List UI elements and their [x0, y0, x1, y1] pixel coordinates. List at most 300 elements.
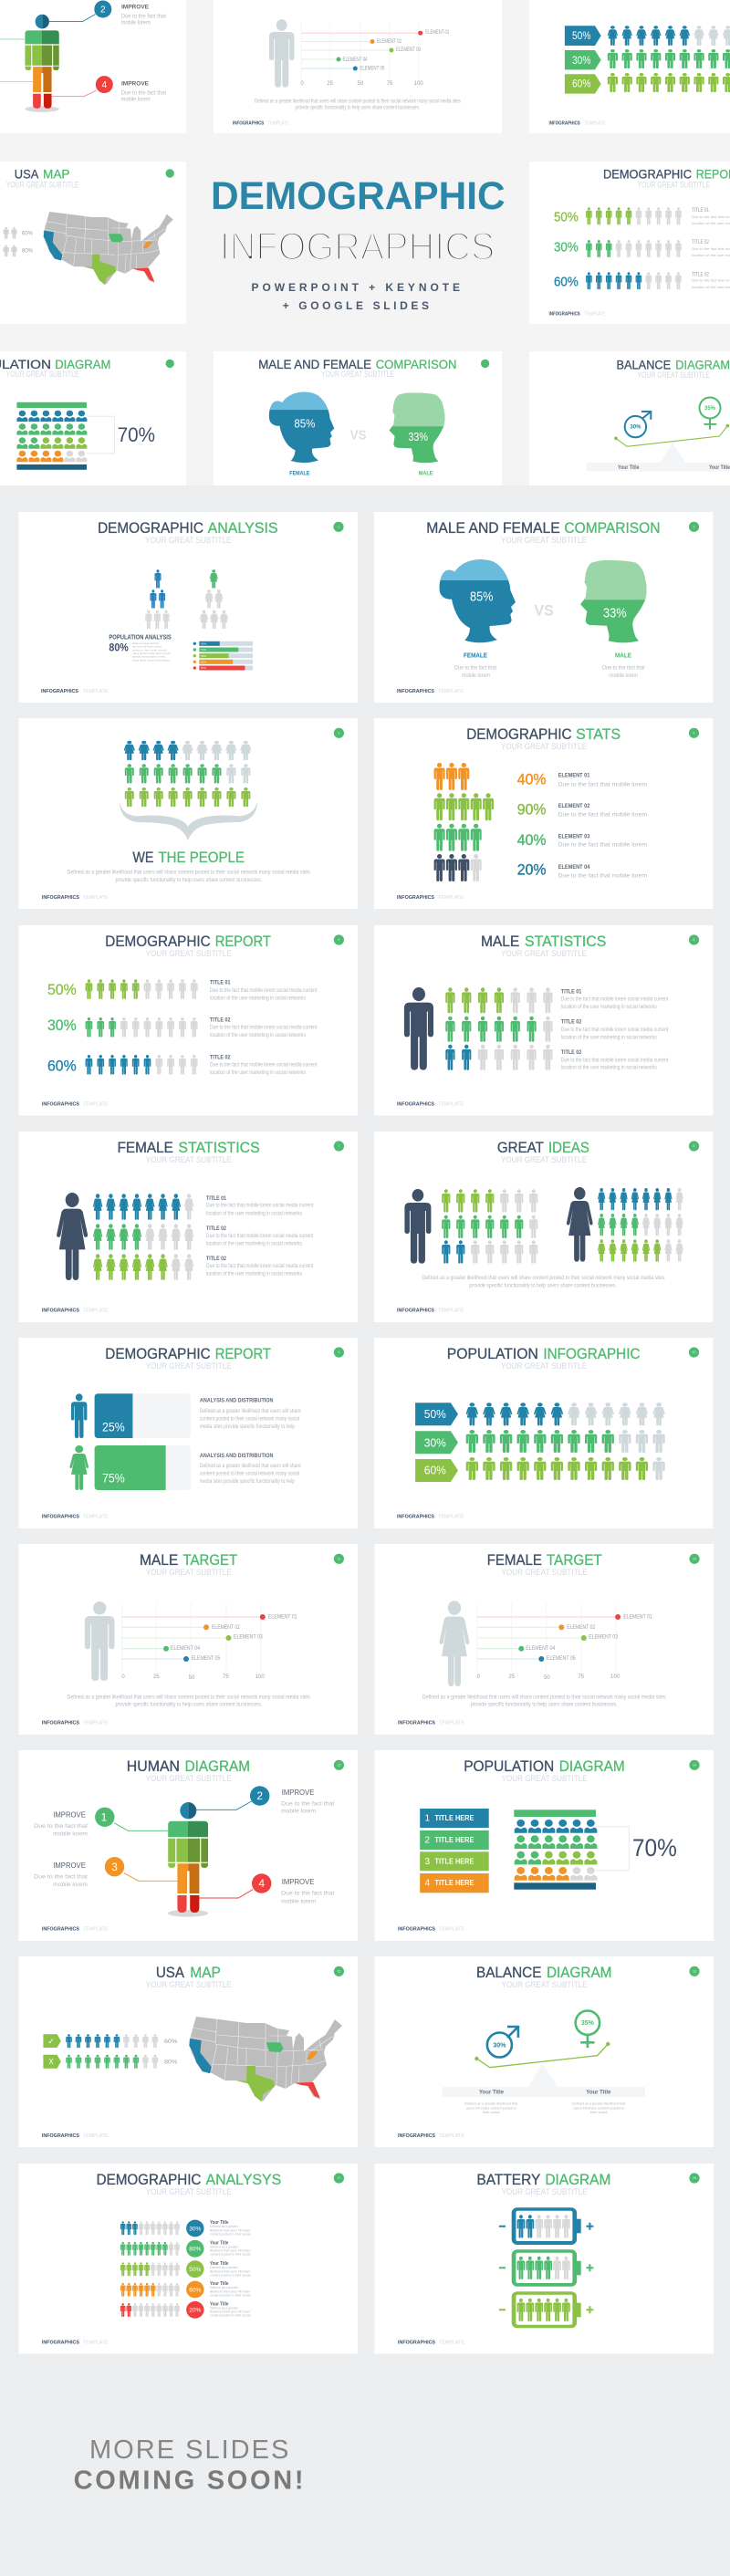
title: [476, 1965, 611, 1981]
title: DIAGRAM: [547, 1965, 611, 1981]
text block 1: ANALYSIS AND DISTRIBUTION: [200, 1398, 274, 1404]
title: DIAGRAM: [55, 358, 110, 371]
chart labels: [343, 30, 450, 71]
male label: Due to the fact that: [602, 665, 645, 672]
label 3: [420, 1851, 489, 1871]
column 1 text: their social: [483, 2111, 500, 2114]
column 2 text: [572, 2090, 625, 2114]
female row 2: [598, 1214, 683, 1236]
chart axis: 0: [477, 1674, 481, 1680]
chart labels: ELEMENT 01: [425, 30, 450, 36]
chart axis: [477, 1674, 620, 1681]
values: 85%: [294, 417, 315, 430]
page number: 13: [337, 1763, 340, 1767]
navy row: [434, 854, 482, 881]
footer: INFOGRAPHICS: [42, 2340, 80, 2345]
percent labels: 80%: [22, 248, 34, 254]
text block 1: content posted to their social network many social: [200, 1415, 299, 1422]
text block 3: [210, 1054, 318, 1076]
text block 2: Defined as a greater: [210, 2245, 239, 2248]
title: MAP: [190, 1965, 221, 1981]
stat 2: ELEMENT 02: [558, 803, 590, 809]
percent labels: 50%: [554, 209, 579, 224]
panel: female target: [374, 1544, 714, 1735]
footer: TEMPLATE: [83, 1927, 109, 1933]
footer: [397, 1309, 464, 1314]
footer: INFOGRAPHICS: [42, 895, 80, 901]
label 2: TITLE HERE: [434, 1836, 474, 1844]
column 2 text: Your Title: [586, 2090, 611, 2096]
title: POPULATION: [464, 1758, 554, 1775]
male head: [389, 393, 444, 463]
subtitle: YOUR GREAT SUBTITLE: [146, 1980, 232, 1989]
icon row 1: [120, 2221, 180, 2235]
page number: [334, 1141, 344, 1152]
title: DEMOGRAPHIC: [105, 933, 211, 950]
text block 1: [206, 1195, 313, 1216]
large male figure: [404, 987, 433, 1070]
footer: TEMPLATE: [584, 311, 606, 317]
text block 3: location of the user marketing in social networks: [210, 1069, 306, 1076]
title: DEMOGRAPHIC: [466, 726, 572, 743]
large female figure: [57, 1193, 88, 1280]
text block 2: Your Title: [210, 2240, 229, 2246]
description: provide specific functionality to help users share content businesses.: [471, 1702, 618, 1708]
female row: [466, 1403, 665, 1425]
page number: [689, 522, 699, 532]
symbol values: 35%: [581, 2020, 595, 2027]
page number: 18: [693, 2176, 696, 2180]
footer: TEMPLATE: [267, 120, 289, 126]
page number: 6: [694, 938, 695, 942]
male label: mobile lorem: [610, 673, 638, 679]
callout 4: 4: [102, 80, 108, 90]
icon row 3: [86, 1055, 198, 1075]
callout 1: 1: [101, 1810, 108, 1823]
female symbol: [699, 398, 721, 430]
subtitle: YOUR GREAT SUBTITLE: [6, 181, 79, 190]
callout text 4: [121, 80, 166, 102]
page number: [689, 728, 699, 738]
percent circles: 60%: [189, 2287, 202, 2293]
text block 1: Your Title: [210, 2220, 229, 2226]
page number: [481, 360, 489, 368]
chart axis: 100: [256, 1674, 265, 1680]
stat 4: ELEMENT 04: [558, 864, 590, 871]
footer: [549, 120, 606, 126]
callout text 2: IMPROVE: [282, 1789, 314, 1797]
text block 2: Due to the fact that mobile lorem social media current: [561, 1027, 668, 1033]
callout text 3: IMPROVE: [53, 1862, 86, 1870]
icon row 3: [445, 1045, 553, 1070]
tag 60%: 60%: [424, 1464, 446, 1477]
footer: [397, 1102, 464, 1108]
chart axis: 75: [578, 1674, 585, 1680]
title: [447, 1346, 641, 1362]
chart labels: ELEMENT 05: [547, 1656, 576, 1662]
title: [617, 359, 730, 372]
title: STATISTICS: [525, 933, 606, 950]
page number: 14: [693, 1763, 696, 1767]
title: ANALYSIS: [208, 520, 278, 537]
label 4: TITLE HERE: [434, 1879, 474, 1887]
text block 2: [210, 2240, 251, 2257]
label 1: 1: [425, 1814, 431, 1823]
panel: male target: [18, 1544, 358, 1735]
male symbol: [625, 412, 651, 437]
callout text 1: Due to the fact that: [34, 1823, 88, 1830]
bar chart: 61%: [201, 661, 206, 664]
male symbol: [487, 2027, 518, 2057]
chart labels: ELEMENT 04: [343, 57, 368, 63]
callout 2: [94, 0, 111, 18]
panel: population diagram: [374, 1750, 714, 1941]
text block 1: Due to the fact that mobile lorem social media current: [206, 1203, 313, 1209]
female label: Due to the fact that: [454, 665, 496, 672]
title: IDEAS: [548, 1140, 589, 1156]
footer: [41, 689, 109, 694]
text block 1: Due to the fact that mobile lorem social media current: [210, 987, 318, 994]
percent labels: 60%: [164, 2039, 178, 2045]
column titles: Your Title: [618, 465, 640, 471]
page number: [334, 728, 344, 738]
footer: TEMPLATE: [438, 689, 464, 694]
text block 1: [561, 988, 668, 1010]
chart labels: ELEMENT 01: [623, 1614, 652, 1620]
female figure: [440, 1601, 469, 1686]
footer: TEMPLATE: [83, 1309, 109, 1314]
footer: [398, 1927, 465, 1933]
text block 3: location of the user marketing in social networks: [561, 1065, 657, 1071]
footer: TEMPLATE: [439, 2133, 465, 2139]
chart axis: [300, 81, 423, 87]
title: DEMOGRAPHIC: [105, 1346, 211, 1362]
footer: [42, 1721, 109, 1726]
panel: we the people: [18, 718, 358, 909]
text block 3: Due to the fact that mobile lorem social media current: [210, 1062, 318, 1069]
title: GREAT: [497, 1140, 544, 1156]
heading: DEMOGRAPHIC: DEMOGRAPHIC: [211, 174, 506, 218]
callout text 4: Due to the fact that: [121, 89, 166, 96]
symbol values: 30%: [493, 2042, 506, 2049]
column 1 text: users Fill share content posted to: [466, 2106, 516, 2110]
title: DEMOGRAPHIC: [97, 2172, 202, 2188]
footer: INFOGRAPHICS: [42, 1309, 80, 1314]
footer: [42, 2133, 109, 2139]
title: BATTERY: [476, 2172, 540, 2188]
page number: [689, 2173, 700, 2184]
title: MALE: [140, 1552, 178, 1569]
tag: x: X: [48, 2058, 54, 2066]
description: Defined as a greater likelihood that users will share content posted to their social network many social media sites: [422, 1275, 665, 1281]
title: [105, 1346, 271, 1362]
footer: TEMPLATE: [83, 2133, 109, 2139]
subtitle: YOUR GREAT SUBTITLE: [146, 1774, 232, 1783]
battery bars: [16, 402, 87, 470]
chart dots: [163, 1614, 266, 1662]
stat 2: Due to the fact that mobile lorem: [558, 811, 647, 818]
green male row: [466, 1430, 665, 1453]
page number: [334, 2173, 344, 2184]
chart axis: 100: [610, 1674, 620, 1680]
label 1: TITLE HERE: [434, 1814, 474, 1822]
title: [0, 358, 110, 371]
footer: INFOGRAPHICS: [397, 1309, 435, 1314]
title: TARGET: [182, 1552, 237, 1569]
text block 3: TITLE 02: [561, 1049, 582, 1056]
title: [118, 1140, 260, 1156]
icon row: lime male: [608, 73, 730, 92]
footer: TEMPLATE: [438, 1515, 464, 1520]
text blocks: [692, 208, 730, 289]
footer: [42, 2340, 109, 2345]
heading: INFOGRAPHICS: INFOGRAPHICS: [220, 224, 495, 268]
footer: INFOGRAPHICS: [41, 689, 79, 694]
percent labels: 60%: [22, 232, 34, 237]
chart dots: [336, 31, 422, 71]
description: Defined as a greater likelihood that users will share content posted to their social network many social media sites: [255, 98, 461, 104]
chart axis: 100: [414, 81, 423, 87]
tag 60%: 60%: [572, 79, 590, 90]
callout 4: 4: [258, 1877, 265, 1890]
text block 1: [200, 1398, 301, 1430]
footer: INFOGRAPHICS: [398, 1927, 436, 1933]
panel: demographic stats: [374, 718, 714, 909]
icon row 1: [66, 2034, 158, 2048]
panel: battery diagram: [374, 2164, 714, 2354]
footer: INFOGRAPHICS: [42, 2133, 80, 2139]
percent labels: 30%: [47, 1017, 77, 1034]
description: provide specific functionality to help users share content businesses.: [115, 877, 262, 883]
callout text 2: [121, 4, 166, 26]
description: [255, 98, 461, 111]
page number: [689, 1347, 699, 1358]
percent labels: 60%: [554, 274, 579, 289]
text block 3: Due to the fact that mobile lorem social media current: [561, 1057, 668, 1063]
column 1 text: Your Title: [479, 2090, 504, 2096]
page number: 11: [338, 1557, 340, 1560]
icon row 1: [586, 207, 682, 224]
callout text 3: mobile lorem: [53, 1882, 88, 1888]
closing text: coming soon: COMING SOON!: [74, 2466, 304, 2495]
text block 4: likelihood that users Fill share: [210, 2289, 251, 2293]
panel: cropped human diagram thumbnail: [0, 0, 186, 133]
page number: 12: [693, 1557, 696, 1560]
values: 33%: [408, 431, 428, 443]
chart axis: 0: [300, 81, 304, 87]
tag: check: ✓: [47, 2037, 55, 2046]
chart labels: ELEMENT 01: [268, 1614, 297, 1620]
chart labels: ELEMENT 02: [567, 1625, 596, 1631]
title: [105, 933, 271, 950]
page number: [689, 1141, 699, 1152]
callout text 1: mobile lorem: [53, 1830, 88, 1837]
text block 1: Defined as a greater likelihood that users will share: [200, 1408, 301, 1414]
subtitle: YOUR GREAT SUBTITLE: [501, 949, 587, 958]
text block 4: Your Title: [210, 2281, 229, 2287]
label 3: TITLE HERE: [434, 1858, 474, 1865]
text block 2: location of the user marketing in social networks: [206, 1241, 302, 1247]
VS: VS: [350, 428, 367, 443]
percent labels: [47, 981, 77, 1074]
figure: human body: [168, 1802, 208, 1917]
female row 3: [598, 1239, 683, 1262]
text block 2: location of the user marketing in social networks: [561, 1034, 657, 1040]
footer: INFOGRAPHICS: [42, 1721, 80, 1726]
bust row 2: [515, 1835, 597, 1849]
callout 1: [95, 1808, 115, 1827]
tagline: POWERPOINT + KEYNOTE: [252, 281, 460, 294]
chart axis: 75: [387, 81, 393, 87]
chart axis: 25: [508, 1674, 516, 1680]
text block 2: TITLE 02: [206, 1225, 226, 1232]
stat 3: 40%: [517, 831, 547, 849]
page number: [334, 1760, 344, 1770]
icon row 4: [120, 2283, 180, 2297]
text block 3: TITLE 02: [210, 1054, 231, 1060]
chart labels: ELEMENT 04: [171, 1646, 201, 1652]
percent labels: 60%: [47, 1057, 77, 1074]
percent labels: [22, 232, 34, 254]
callout text 4: IMPROVE: [282, 1878, 314, 1886]
chart axis: 0: [121, 1674, 125, 1680]
text block 1: location of the user marketing in social networks: [210, 995, 306, 1001]
panel: cropped male target thumbnail: [214, 0, 502, 133]
footer: TEMPLATE: [584, 120, 606, 126]
panel: great ideas: [374, 1132, 714, 1322]
text block 1: media sites provide specific functionality to help: [200, 1424, 295, 1430]
bust row 4: [515, 1867, 597, 1881]
title: [487, 1552, 602, 1569]
percentage: 70%: [632, 1834, 677, 1862]
stat 3: [517, 831, 647, 849]
description: [68, 870, 310, 883]
subtitle: YOUR GREAT SUBTITLE: [501, 1155, 587, 1164]
subtitle: YOUR GREAT SUBTITLE: [6, 370, 79, 379]
text block 3: [561, 1049, 668, 1071]
subtitle: YOUR GREAT SUBTITLE: [501, 742, 587, 751]
subtitle: YOUR GREAT SUBTITLE: [145, 536, 231, 545]
icon row 2: [445, 1017, 553, 1042]
chart labels: ELEMENT 02: [377, 39, 402, 45]
fulcrum: [587, 443, 730, 471]
stat 3: ELEMENT 03: [558, 833, 590, 840]
top and bottom bars: [514, 1809, 596, 1890]
chart axis: 75: [223, 1674, 229, 1680]
male label: [602, 652, 645, 679]
title: MALE AND FEMALE: [258, 358, 371, 371]
footer: TEMPLATE: [83, 1515, 109, 1520]
text blocks: TITLE 02: [692, 272, 710, 277]
chart labels: ELEMENT 04: [526, 1646, 556, 1652]
labels: MALE: [419, 471, 433, 477]
tag 30%: [415, 1431, 458, 1454]
text block 4: [210, 2281, 251, 2297]
description: [132, 641, 171, 662]
panel: human diagram: [18, 1750, 358, 1941]
panel: population infographic: [374, 1338, 714, 1528]
text block 2: media sites provide specific functionality to help: [200, 1478, 295, 1485]
female head: [269, 392, 334, 463]
text block 1: [210, 980, 318, 1001]
lime male row: [466, 1457, 665, 1480]
description: [68, 1694, 310, 1708]
icon row 3: [586, 272, 682, 289]
beam: [474, 2042, 610, 2068]
text block 5: Defined as a greater: [210, 2306, 239, 2310]
page number: 16: [693, 1969, 696, 1973]
footer: TEMPLATE: [439, 1721, 465, 1726]
description: users share content businesses.: [132, 659, 171, 662]
title: INFOGRAPHIC: [543, 1346, 641, 1362]
footer: TEMPLATE: [438, 1309, 464, 1314]
stat 4: Due to the fact that mobile lorem: [558, 873, 647, 880]
page number: 3: [338, 732, 339, 735]
column 2 text: Defined as a greater likelihood that: [572, 2102, 625, 2106]
percent labels: 80%: [164, 2060, 178, 2065]
tag 60%: [565, 74, 601, 94]
text block 2: Defined as a greater likelihood that users will share: [200, 1463, 301, 1469]
label 3: 3: [425, 1857, 431, 1867]
text block 2: Due to the fact that mobile lorem social media current: [206, 1233, 313, 1239]
percent labels: [164, 2039, 178, 2065]
chart labels: ELEMENT 03: [589, 1634, 619, 1640]
icon rows: [4, 227, 17, 256]
description: provide specific functionality to help users share content businesses.: [469, 1283, 617, 1289]
title: STATS: [576, 726, 620, 743]
panel: population diagram thumbnail: [0, 351, 186, 485]
subtitle: YOUR GREAT SUBTITLE: [637, 370, 710, 380]
bust row 1: [515, 1820, 597, 1833]
panel: balance diagram: [374, 1956, 714, 2147]
text block 1: likelihood that users Fill share: [210, 2228, 251, 2232]
stat 2: [517, 801, 647, 819]
title: [156, 1965, 221, 1981]
stat 1: ELEMENT 01: [558, 773, 590, 779]
text block 1: location of the user marketing in social networks: [561, 1004, 657, 1010]
percent circles: 30%: [189, 2226, 202, 2232]
title: [497, 1140, 589, 1156]
title: BALANCE: [617, 359, 671, 372]
female label: FEMALE: [464, 652, 487, 659]
subtitle: YOUR GREAT SUBTITLE: [146, 2187, 232, 2196]
text block 5: likelihood that users Fill share: [210, 2310, 251, 2314]
subtitle: YOUR GREAT SUBTITLE: [501, 1361, 587, 1371]
labels: [289, 471, 433, 477]
text block 4: content posted to their social: [210, 2293, 251, 2297]
battery 2: [499, 2249, 593, 2287]
icon row 2: [120, 2242, 180, 2256]
icon row 2: [586, 240, 682, 257]
callout text 1: [34, 1810, 88, 1837]
callout text 2: IMPROVE: [121, 4, 150, 10]
chart labels: [171, 1614, 297, 1662]
subtitle: YOUR GREAT SUBTITLE: [637, 181, 710, 190]
panel: demographic analysys: [18, 2164, 358, 2354]
footer: [549, 311, 606, 317]
map: [42, 210, 173, 285]
large male figure: [404, 1189, 431, 1264]
page number: [166, 169, 174, 178]
text block 2: TITLE 02: [210, 1017, 231, 1023]
percent labels: 30%: [554, 239, 579, 256]
title: DEMOGRAPHIC: [603, 168, 692, 182]
footer: TEMPLATE: [83, 2340, 109, 2345]
tag 30%: 30%: [424, 1435, 446, 1449]
footer: [397, 895, 464, 901]
male row 1: [442, 1189, 537, 1213]
text block 2: TITLE 02: [561, 1019, 582, 1026]
